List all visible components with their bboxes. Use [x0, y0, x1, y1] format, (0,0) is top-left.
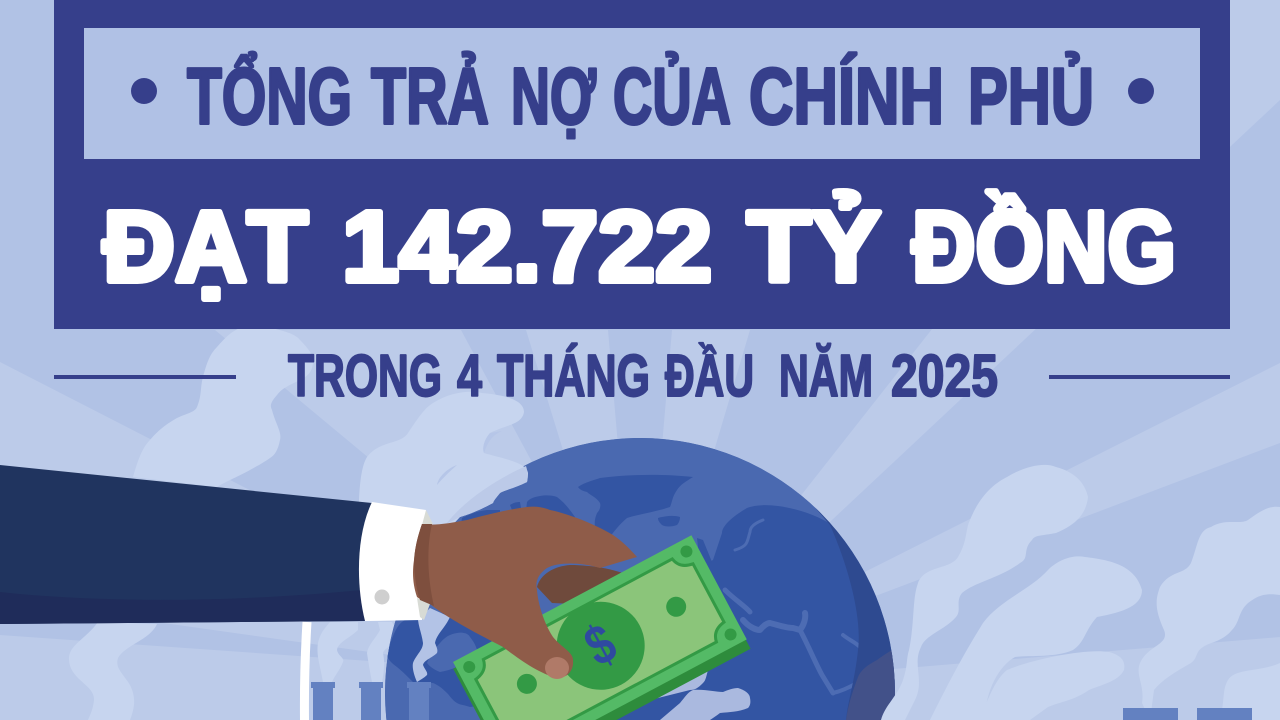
banknote	[450, 535, 751, 720]
hand	[413, 507, 637, 679]
subtitle: 4	[457, 343, 482, 409]
subtitle: TRONG	[288, 343, 442, 409]
cuff	[359, 502, 426, 621]
light landmass inside continent	[427, 633, 477, 672]
dollar sign: $	[574, 611, 626, 678]
subtitle: 2025	[891, 343, 998, 409]
left bullet	[131, 78, 157, 104]
orbit ring	[304, 622, 307, 720]
title line 1: TRẢ	[371, 52, 489, 140]
title line 1	[187, 52, 1094, 140]
chimney 4	[1123, 708, 1178, 720]
title line 2	[103, 191, 1176, 303]
light ocean	[385, 438, 832, 720]
thumbnail	[545, 657, 569, 679]
globe	[385, 438, 895, 720]
seas	[725, 520, 877, 693]
chimney 5	[1197, 708, 1252, 720]
right bullet	[1128, 78, 1154, 104]
continents	[386, 475, 712, 707]
shirt sliver bottom	[417, 598, 430, 620]
title line 1: TỔNG	[187, 52, 352, 140]
smoke: background plumes	[69, 326, 1280, 720]
title line 2: ĐẠT	[103, 191, 308, 303]
title line 1: PHỦ	[968, 52, 1094, 140]
right divider	[1049, 375, 1230, 379]
chimney 3	[407, 682, 431, 720]
night crescent	[815, 508, 895, 716]
right dot	[663, 593, 690, 620]
note stack edge	[453, 541, 751, 720]
title box	[84, 28, 1200, 159]
chimney smoke between ring and globe	[317, 622, 398, 682]
wrist shade	[414, 524, 434, 606]
title line 1: CỦA	[613, 52, 731, 140]
cuff button	[374, 590, 390, 604]
note border	[453, 535, 747, 720]
arm with sleeve	[0, 465, 433, 624]
title line 2: TỶ	[747, 191, 881, 303]
left divider	[54, 375, 236, 379]
smoke: right plume over globe	[881, 465, 1088, 720]
title line 2: 142.722	[342, 191, 712, 303]
title line 1: NỢ	[511, 52, 597, 140]
chimney 2	[359, 682, 383, 720]
subtitle row	[54, 343, 1230, 409]
cloud over globe	[650, 670, 750, 720]
smoke over globe edge	[359, 392, 528, 560]
subtitle: NĂM	[779, 343, 873, 409]
chimney 1	[311, 682, 335, 720]
header panel	[54, 0, 1230, 329]
title line 1: CHÍNH	[749, 52, 944, 140]
left dot	[513, 670, 540, 697]
subtitle: ĐẦU	[665, 343, 754, 409]
shirt sliver top	[422, 510, 433, 525]
subtitle	[288, 343, 998, 409]
finger shadow behind banknote	[537, 565, 640, 605]
title line 2: ĐỒNG	[912, 191, 1176, 303]
note face	[469, 551, 731, 720]
sleeve	[0, 465, 372, 624]
subtitle: THÁNG	[497, 343, 650, 409]
corner ornaments	[678, 543, 695, 560]
central seal	[541, 586, 660, 705]
smoke tendril from chimney	[413, 608, 450, 682]
